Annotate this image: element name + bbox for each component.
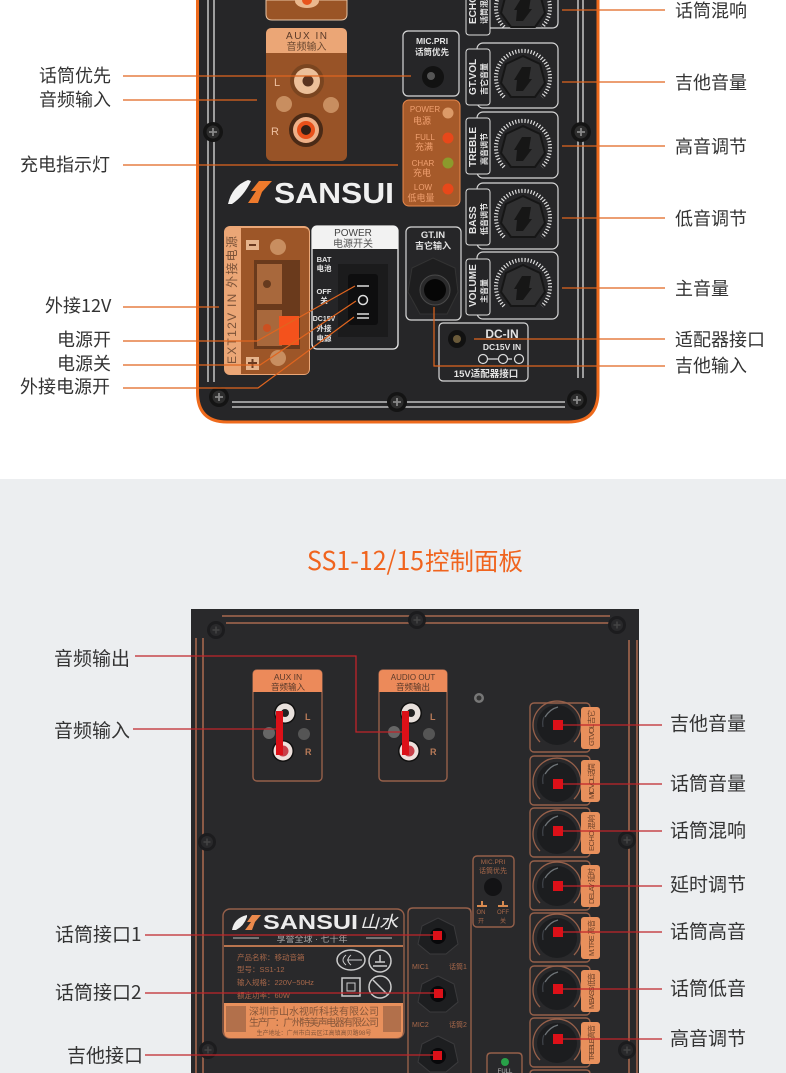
product nameplate: 型号：SS1-12 [237,965,285,974]
product nameplate: 生产厂：广州特美声电器有限公司 [249,1016,379,1029]
AUX IN orange panel: R [271,126,279,138]
lower right labels: 话筒高音 [670,917,746,944]
knob: echo: ECHO 混响 [586,815,596,851]
knob: mic bass: M.BASS 低音 [586,972,596,1009]
external 12V panel [224,226,310,375]
panel body with orange edge [198,0,598,422]
GT.IN jack box: 吉它输入 [415,240,451,251]
LED indicator panel: POWER [410,105,440,114]
knob: treble [466,112,558,178]
lower screws [198,611,636,1059]
knob: main volume: VOLUME [468,264,479,307]
upper right labels: 低音调节 [675,205,747,231]
LED indicator panel: LOW [414,183,433,192]
product nameplate: 产品名称：移动音箱 [237,952,305,962]
knob: guitar volume: GT.VOL 吉它 [586,710,596,746]
MIC PRI box: MIC.PRI [481,859,505,866]
power switch box: DC15V [313,316,336,323]
MIC PRI box: 开 [478,918,484,925]
AUX IN box: R [305,747,312,757]
LED indicator panel: 电源 [413,115,431,126]
LED indicator panel: CHAR [412,159,435,168]
title: SS1-12/15 [307,541,424,578]
power switch box: 电源 [316,333,332,343]
AUDIO OUT box: R [430,747,437,757]
upper right labels: 主音量 [675,275,729,301]
upper left labels: 外接电源开 [20,373,110,399]
SANSUI logo [228,178,394,210]
knob: guitar volume: GT.VOL [468,59,479,95]
knob frames and tags [530,701,600,1073]
knob: guitar volume: 吉它音量 [479,63,489,95]
mic jacks box: 话筒1 [449,962,467,971]
LED indicator panel: 低电量 [407,192,435,203]
upper right labels: 吉他音量 [675,69,747,95]
MIC PRI box [473,856,514,927]
DC-IN box: 15V适配器接口 [454,368,518,380]
knob: delay [530,861,600,910]
lower right labels: 吉他音量 [670,709,746,736]
DC-IN box [439,323,528,381]
knob: bass [466,183,558,249]
DC-IN box: DC-IN [485,327,519,341]
AUX IN box: AUX IN [274,672,302,682]
upper left labels [20,62,112,399]
upper left labels: 电源关 [57,350,111,376]
FULL indicator box [487,1053,522,1073]
external 12V panel: EXT12V IN 外接电源 [224,236,239,364]
knob: treble: TREBLE 高音 [586,1024,596,1061]
callout lines: upper left [123,76,411,388]
lower right labels: 话筒混响 [670,816,746,843]
knob: bass: 低音调节 [479,203,489,235]
power switch box: 外接 [316,323,332,333]
product nameplate: 享誉全球 · 七十年 [276,933,348,944]
red markers [276,711,563,1060]
AUX IN orange panel: L [274,77,280,89]
AUDIO OUT box: AUDIO OUT [391,673,435,682]
AUDIO OUT box: L [430,712,436,722]
upper right labels: 高音调节 [675,133,747,159]
knob: treble: TREBLE [468,127,479,167]
knob: mic volume [530,756,600,805]
upper left labels: 充电指示灯 [20,151,110,177]
knob: guitar volume [466,43,558,108]
MIC PRI box: 话筒优先 [415,47,449,57]
lower left labels: 音频输出 [54,644,130,671]
knob: mic bass [530,966,600,1015]
mic jacks box: 话筒2 [449,1020,467,1029]
AUX IN orange panel: 音频输入 [286,40,326,53]
screws [203,122,591,412]
product nameplate: 输入规格：220V~50Hz [237,977,314,987]
knob: delay: DELAY 延时 [586,868,596,904]
AUX IN box: L [305,712,311,722]
MIC PRI box: 话筒优先 [479,866,507,875]
upper left labels: 话筒优先 [39,62,111,88]
product nameplate: 生产地址：广州市白云区江高镇高贝路98号 [257,1029,371,1037]
page background: lower section [0,479,786,1073]
knob: bass: BASS [468,206,479,234]
lower left labels: 音频输入 [54,716,130,743]
MIC PRI box: 关 [500,917,506,925]
power switch box: OFF [316,287,332,296]
lower left labels: 话筒接口1 [55,920,142,947]
lower left labels [54,644,143,1068]
LED indicator panel: 充满 [415,141,433,152]
product nameplate: SANSUI [263,912,358,934]
MIC PRI box: ON [476,910,486,916]
LED indicator panel: 充电 [413,167,431,178]
title: 控制面板 [425,543,523,578]
top orange panel remnant [266,0,347,20]
lower right labels: 话筒低音 [670,974,746,1001]
product nameplate: 深圳市山水视听科技有限公司 [249,1005,379,1018]
power switch box: 电池 [316,263,332,273]
MIC PRI box: OFF [497,910,509,916]
lower left labels: 吉他接口 [67,1041,143,1068]
upper right labels: 吉他输入 [675,352,747,378]
power switch box: POWER [334,228,372,239]
upper right labels [675,0,765,378]
knob: treble: 高音调节 [479,133,489,165]
knob: mic treble: M.TRE 高音 [586,920,596,956]
upper right labels: 适配器接口 [675,326,765,352]
upper left labels: 电源开 [57,326,111,352]
knob: mic treble [530,913,600,962]
knob: guitar volume [530,701,600,752]
upper left labels: 音频输入 [39,86,111,112]
power switch box: 关 [320,295,328,305]
AUX IN orange panel: AUX IN [286,31,327,42]
knob: mic volume: MIC VOL 话筒 [586,762,596,799]
product nameplate [223,909,404,1038]
DC-IN box: DC15V IN [483,342,521,352]
MIC PRI box [403,31,459,96]
product nameplate: 山水 [360,913,399,932]
lower right labels: 延时调节 [670,870,746,897]
page background: top [0,0,786,479]
lower left labels: 话筒接口2 [55,978,142,1005]
mic jacks box: MIC2 [412,1022,429,1029]
GT.IN jack box [406,227,461,320]
MIC PRI box: MIC.PRI [416,36,448,46]
knob: main volume [466,252,558,319]
mic jacks box [408,908,471,1073]
knob: echo [466,0,558,35]
panel: lower control panel [191,609,639,1073]
AUX IN box: 音频输入 [271,682,305,692]
GT.IN jack box: GT.IN [421,230,445,241]
knob: main volume: 主音量 [479,279,489,303]
power switch box [312,226,398,349]
lower right labels [670,709,746,1051]
AUX IN box [253,670,322,781]
knob: echo [530,808,600,857]
AUX IN orange panel [266,28,347,161]
mic jacks box: MIC1 [412,964,429,971]
power switch box: 电源开关 [333,237,373,250]
lower panel body [191,609,639,1073]
panel: upper control panel [198,0,598,422]
lower right labels: 话筒音量 [670,769,746,796]
callout lines: lower [133,656,662,1055]
AUDIO OUT box [379,670,447,781]
lower right labels: 高音调节 [670,1024,746,1051]
power switch box: BAT [317,255,332,264]
knob: treble [530,1018,600,1067]
SANSUI logo: SANSUI [274,178,394,210]
LED indicator panel [403,100,460,206]
LED indicator panel: FULL [415,133,435,142]
AUDIO OUT box: 音频输出 [396,682,430,692]
upper left labels: 外接12V [45,292,112,318]
callout lines: upper right [434,10,665,366]
title [307,541,523,578]
product nameplate: 额定功率：60W [237,990,291,1000]
